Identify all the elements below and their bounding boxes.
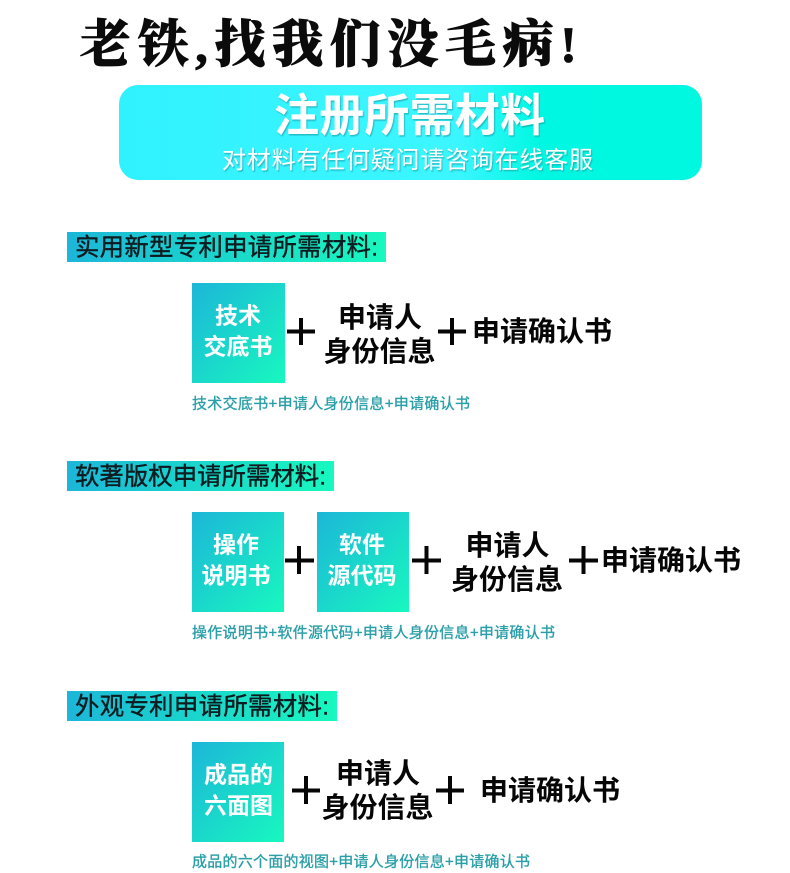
plus icon <box>569 546 598 574</box>
plus icon <box>287 318 315 345</box>
section heading: 外观专利申请所需材料: <box>75 694 329 720</box>
material box: technical disclosure: 交底书 <box>204 334 272 360</box>
caption: 技术交底书+申请人身份信息+申请确认书 <box>192 394 470 412</box>
banner subtitle: 对材料有任何疑问请咨询在线客服 <box>222 147 593 174</box>
applicant identity: 申请人 <box>336 758 420 789</box>
material box: six views: 成品的 <box>204 762 273 788</box>
application confirmation: 申请确认书 <box>472 316 612 347</box>
application confirmation: 申请确认书 <box>480 775 620 806</box>
applicant identity <box>451 530 563 595</box>
material box: source code: 软件 <box>339 532 385 558</box>
material box: operation manual: 说明书 <box>202 562 270 588</box>
plus icon <box>438 318 466 345</box>
title: 老铁,找我们没毛病! <box>80 17 577 74</box>
panel: software copyright <box>67 461 741 642</box>
plus icon <box>412 546 441 574</box>
material box: source code <box>317 512 409 612</box>
material box: source code: 源代码 <box>328 562 396 588</box>
caption: 操作说明书+软件源代码+申请人身份信息+申请确认书 <box>192 624 555 642</box>
section heading: 软著版权申请所需材料: <box>75 464 326 490</box>
material box: six views: 六面图 <box>204 792 273 818</box>
applicant identity <box>321 758 434 823</box>
applicant identity: 身份信息 <box>451 564 563 595</box>
material box: operation manual: 操作 <box>213 532 259 558</box>
section heading: 实用新型专利申请所需材料: <box>75 234 378 262</box>
material box: operation manual <box>192 512 284 612</box>
banner heading: 注册所需材料 <box>274 90 545 141</box>
applicant identity: 身份信息 <box>323 336 436 367</box>
applicant identity: 申请人 <box>338 302 422 333</box>
caption: 成品的六个面的视图+申请人身份信息+申请确认书 <box>192 854 530 870</box>
application confirmation: 申请确认书 <box>601 545 741 576</box>
applicant identity: 申请人 <box>465 530 550 561</box>
panel: banner <box>119 85 702 180</box>
plus icon <box>285 546 314 574</box>
panel: utility model patent <box>67 232 612 412</box>
applicant identity: 身份信息 <box>321 792 434 823</box>
material box: technical disclosure <box>192 283 285 383</box>
panel: design patent <box>67 691 620 870</box>
material box: technical disclosure: 技术 <box>215 302 261 328</box>
material box: six views <box>192 742 284 842</box>
plus icon <box>436 776 464 804</box>
applicant identity <box>323 302 436 367</box>
plus icon <box>292 776 320 804</box>
